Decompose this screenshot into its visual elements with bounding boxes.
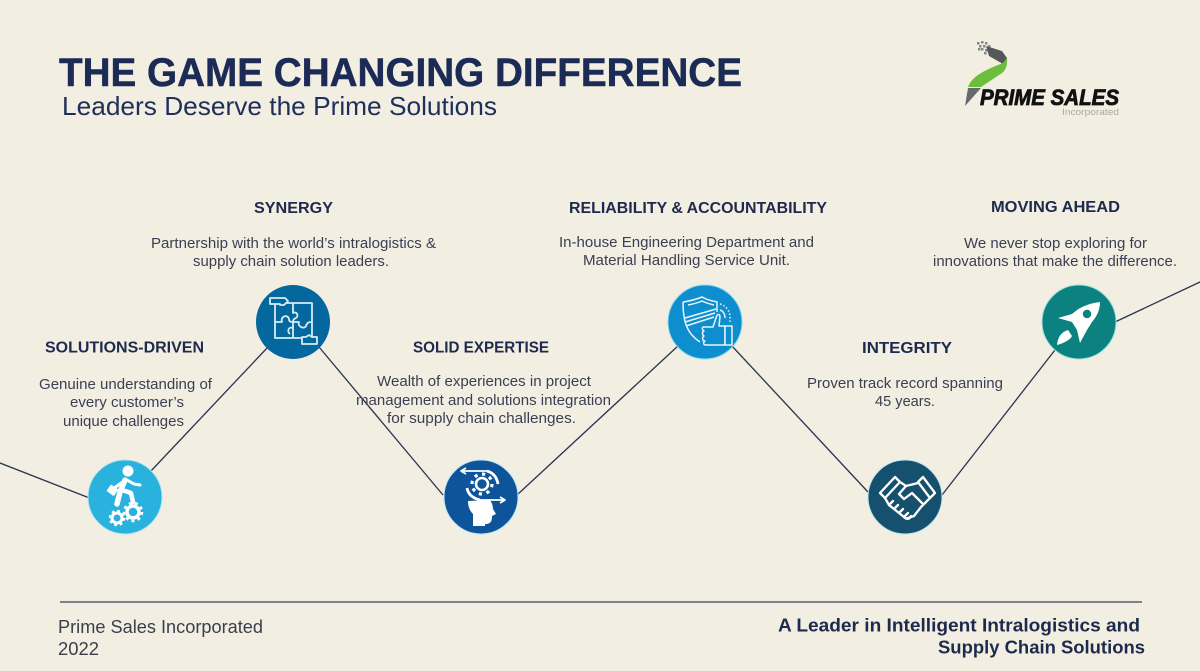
block: solid expertise: for supply chain challenges. [387,411,576,427]
block: synergy [151,200,436,270]
title: THE GAME CHANGING DIFFERENCE [59,51,742,95]
block: solid expertise: management and solutions integration [356,393,611,409]
block: solutions-driven: unique challenges [63,414,184,430]
footer: tagline: Supply Chain Solutions [938,636,1145,658]
block: integrity: 45 years. [875,394,935,410]
icon: puzzle [256,285,330,359]
footer: company and year: Prime Sales Incorporated [58,616,263,637]
block: solutions-driven: SOLUTIONS-DRIVEN [45,340,204,356]
icon: head with gear [444,460,518,534]
icon: handshake [868,460,942,534]
block: reliability and accountability: In-house Engineering Department and [559,235,814,251]
logo: Prime Sales [965,41,1119,118]
block: moving ahead: We never stop exploring for [964,236,1147,252]
footer: tagline: A Leader in Intelligent Intralogistics and [778,614,1140,636]
icon: person climbing on gears [88,460,162,534]
block: integrity [807,340,1003,410]
block: solid expertise: Wealth of experiences in project [377,374,591,390]
block: reliability and accountability: RELIABILITY & ACCOUNTABILITY [569,200,828,217]
block: solid expertise [356,340,611,427]
subtitle: Leaders Deserve the Prime Solutions [62,91,497,121]
block: moving ahead [933,199,1177,270]
footer divider [60,601,1142,603]
block: synergy: Partnership with the world’s intralogistics & [151,236,436,252]
block: solutions-driven: Genuine understanding of [39,377,213,393]
footer: company and year [58,616,263,659]
block: reliability and accountability [559,200,828,269]
footer: company and year: 2022 [58,638,99,659]
block: moving ahead: innovations that make the difference. [933,254,1177,270]
icon: shield with thumbs up [668,285,742,359]
block: reliability and accountability: Material Handling Service Unit. [583,253,790,269]
block: moving ahead: MOVING AHEAD [991,199,1120,216]
block: solid expertise: SOLID EXPERTISE [413,340,549,356]
logo: Prime Sales: Incorporated [1062,107,1119,118]
block: solutions-driven: every customer’s [70,395,184,411]
block: integrity: INTEGRITY [862,340,953,357]
icon: rocket [1042,285,1116,359]
block: synergy: SYNERGY [254,200,334,217]
logo: Prime Sales: PRIME SALES [980,85,1119,110]
block: solutions-driven [39,340,213,430]
block: integrity: Proven track record spanning [807,376,1003,392]
block: synergy: supply chain solution leaders. [193,254,389,270]
footer: tagline [778,614,1145,658]
zigzag timeline line [0,282,1200,499]
